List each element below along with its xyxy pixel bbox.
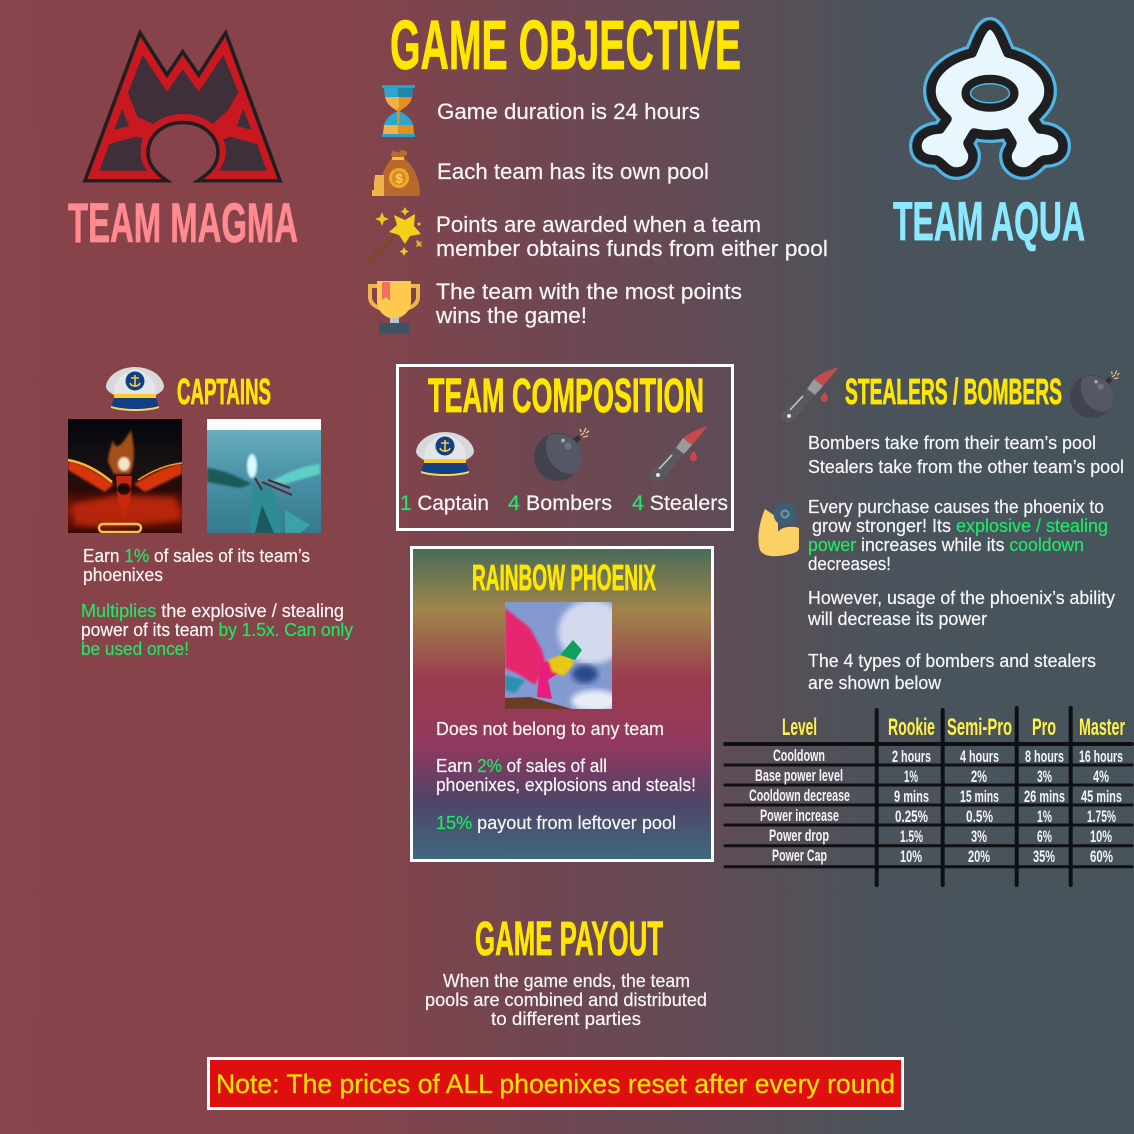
text: bombers and stealers: Stealers take from the other team’s pool [808, 457, 1124, 477]
text: rainbow description: Earn 2% of sales of all [436, 756, 607, 776]
icon: money bag: $ [395, 171, 403, 186]
icon: magic wand [366, 207, 422, 263]
table: levels: 4 hours [960, 747, 999, 766]
text: captain multiplier: power of its team by 1.5x. Can only [81, 620, 353, 640]
table: levels: 8 hours [1025, 747, 1064, 766]
icon: trophy [370, 281, 418, 333]
text: payout description: When the game ends, the team [443, 971, 690, 991]
team magma panel [68, 33, 298, 254]
text: the team wins: The team with the most points [436, 279, 742, 304]
icon: captain hat [416, 432, 474, 476]
table: levels: Power Cap [772, 846, 827, 865]
icon: knife [650, 426, 708, 482]
heading: rainbow phoenix: RAINBOW PHOENIX [472, 557, 656, 598]
table: levels: 1.5% [900, 827, 923, 846]
table: levels: Semi-Pro [947, 714, 1012, 741]
table: levels: Cooldown decrease [749, 786, 850, 805]
table: levels: 10% [900, 847, 922, 866]
title: GAME OBJECTIVE [390, 6, 741, 84]
table: levels: Power increase [760, 806, 839, 825]
icon: team magma logo [85, 33, 280, 181]
label: 4 stealers: 4 Stealers [632, 492, 728, 515]
text: captain earnings [83, 546, 310, 585]
text: the team wins: wins the game! [435, 303, 587, 328]
image: ocean phoenix [207, 419, 321, 533]
panel: team aqua [893, 25, 1085, 252]
heading: team magma: TEAM MAGMA [68, 191, 298, 254]
text: points awarded: Points are awarded when a team [436, 212, 761, 237]
text: types intro [808, 651, 1096, 693]
panel: team composition [398, 366, 732, 530]
text: payout description: to different parties [491, 1009, 641, 1029]
text: purchase effect: Every purchase causes the phoenix to [808, 497, 1104, 517]
table: levels: 1% [1037, 807, 1052, 826]
table: levels: 10% [1090, 827, 1112, 846]
text: ability usage: will decrease its power [807, 609, 987, 629]
heading: team composition: TEAM COMPOSITION [428, 370, 704, 423]
text: points awarded [436, 212, 828, 261]
table: levels [725, 708, 1132, 885]
callout: note [208, 1058, 902, 1108]
text: captain earnings: phoenixes [83, 565, 163, 585]
icon: muscle arm [758, 502, 799, 556]
table: levels: 4% [1093, 767, 1109, 786]
image: fire phoenix [68, 419, 182, 533]
text: purchase effect: grow stronger! Its explosive / stealing [812, 516, 1108, 536]
text: points awarded: member obtains funds from either pool [436, 236, 828, 261]
text: ability usage: However, usage of the phoenix’s ability [808, 588, 1115, 608]
text: types intro: are shown below [808, 673, 942, 693]
table: levels: 3% [1037, 767, 1052, 786]
icon: money bag [372, 150, 420, 196]
image: rainbow phoenix [505, 602, 612, 709]
icon: hourglass [382, 85, 415, 137]
icon: bomb [1070, 370, 1120, 418]
table: levels: Base power level [755, 766, 843, 785]
text: bombers and stealers: Bombers take from their team’s pool [808, 433, 1096, 453]
text: captain multiplier [81, 601, 353, 659]
heading: captains: CAPTAINS [177, 371, 271, 412]
text: bombers and stealers [808, 433, 1124, 477]
text: rainbow description: 15% payout from leftover pool [436, 813, 676, 833]
table: levels: 35% [1033, 847, 1055, 866]
text: captain earnings: Earn 1% of sales of its team’s [83, 546, 310, 566]
table: levels: Pro [1032, 714, 1056, 741]
text: the team wins [435, 279, 742, 328]
text: game duration: Game duration is 24 hours [437, 99, 700, 124]
table: levels: 1.75% [1087, 807, 1116, 826]
icon: team aqua logo [917, 25, 1063, 172]
table: levels: 3% [971, 827, 987, 846]
callout: note: Note: The prices of ALL phoenixes reset after every round [216, 1069, 895, 1099]
heading: game payout: GAME PAYOUT [475, 913, 663, 966]
text: rainbow description [436, 719, 696, 833]
text: types intro: The 4 types of bombers and stealers [808, 651, 1096, 671]
table: levels: 20% [968, 847, 990, 866]
label: 4 bombers: 4 Bombers [508, 492, 612, 515]
icon: knife [781, 367, 839, 423]
text: purchase effect: decreases! [808, 554, 891, 574]
icon: captain hat [106, 367, 164, 411]
table: levels: 26 mins [1024, 787, 1065, 806]
table: levels: Rookie [888, 714, 935, 741]
table: levels: 9 mins [894, 787, 929, 806]
text: rainbow description: phoenixes, explosions and steals! [436, 775, 696, 795]
panel: captains [68, 367, 353, 659]
text: payout description: pools are combined and distributed [425, 990, 707, 1010]
table: levels: Level [782, 714, 817, 741]
table: levels: Power drop [769, 826, 829, 845]
table: levels: 60% [1090, 847, 1113, 866]
table: levels: Cooldown [773, 746, 825, 765]
panel: game objective [366, 6, 828, 333]
text: rainbow description: Does not belong to any team [436, 719, 664, 739]
table: levels: 15 mins [960, 787, 999, 806]
icon: bomb [534, 428, 589, 481]
text: purchase effect: power increases while its cooldown [808, 535, 1084, 555]
table: levels: 0.5% [966, 807, 993, 826]
text: ability usage [807, 588, 1115, 629]
table: levels: 1% [904, 767, 918, 786]
panel: stealers and bombers [758, 367, 1124, 693]
table: levels: 2 hours [892, 747, 931, 766]
text: payout description [425, 971, 707, 1029]
text: captain multiplier: be used once! [81, 639, 189, 659]
panel: rainbow phoenix [412, 548, 712, 860]
label: 1 captain: 1 Captain [400, 492, 489, 515]
table: levels: 6% [1037, 827, 1052, 846]
text: own pool: Each team has its own pool [437, 159, 709, 184]
panel: game payout [425, 913, 707, 1029]
table: levels: 2% [971, 767, 987, 786]
text: captain multiplier: Multiplies the explosive / stealing [81, 601, 344, 621]
table: levels: 0.25% [895, 807, 928, 826]
text: purchase effect [808, 497, 1108, 574]
